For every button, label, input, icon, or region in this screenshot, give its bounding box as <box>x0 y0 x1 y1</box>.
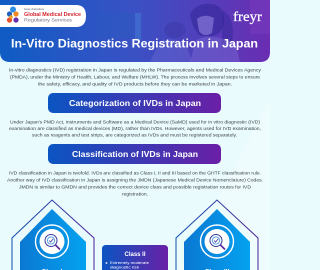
heading: Classification of IVDs in Japan <box>48 144 221 164</box>
logo text: Center of Excellence <box>24 7 44 11</box>
classification paragraph: registration. <box>122 192 148 197</box>
categorization paragraph: examination are classified as medical devices (MD), rather than IVDs. However, agents used for IVD examination, <box>9 126 261 131</box>
classification paragraph: Another way of IVD classification in Japan is assigning the JMDN (Japanese Medical Device Nomenclature) Codes. <box>7 178 263 183</box>
icon: coloured dots cluster <box>7 6 19 23</box>
freyr logo: freyr <box>233 10 262 25</box>
bullet text: diagnostic risk <box>110 266 139 270</box>
classification paragraph: IVD classification in Japan is twofold. IVDs are classified as Class I, II and III based on the GHTF classification rule. <box>9 171 261 176</box>
header banner <box>0 0 270 62</box>
panel: Class I <box>12 200 94 270</box>
bullet text: Extremely moderate <box>110 261 149 265</box>
panel: Class III <box>176 200 258 270</box>
logo: Global Medical Device Regulatory Services <box>0 5 86 27</box>
logo text <box>24 7 81 24</box>
logo text: Regulatory Services <box>24 18 73 24</box>
classification paragraph: JMDN is similar to GMDN and provides the correct device class and possible registration routes for IVD <box>19 185 251 190</box>
classification paragraph <box>7 171 263 197</box>
categorization paragraph: such as reagents and test strips, are categorized as IVDs and must be registered separately. <box>32 133 237 138</box>
categorization paragraph <box>9 120 261 138</box>
title: In-Vitro Diagnostics Registration in Japan <box>11 38 258 51</box>
intro paragraph <box>9 68 262 87</box>
label: Class II: Class II <box>124 252 146 258</box>
categorization paragraph: Under Japan's PMD Act, instruments and Software as a Medical Device (SaMD) used for in vitro diagnostic (IVD) <box>10 120 261 125</box>
icon: magnifier check <box>200 225 234 258</box>
heading: Categorization of IVDs in Japan: Categorization of IVDs in Japan <box>69 98 201 108</box>
panel: Class II <box>102 245 168 270</box>
heading: Categorization of IVDs in Japan <box>48 93 221 113</box>
intro paragraph: In-vitro diagnostics (IVD) registration in Japan is regulated by the Pharmaceuticals and Medical Devices Agency <box>9 68 262 73</box>
intro paragraph: (PMDA), under the Ministry of Health, Labour, and Welfare (MHLW). The process involves several steps to ensure <box>10 75 261 80</box>
bullet text <box>106 261 149 270</box>
icon: magnifier check <box>36 225 68 258</box>
logo text: Global Medical Device <box>24 12 81 18</box>
photo: scientists <box>96 0 270 62</box>
intro paragraph: the safety, efficacy, and quality of IVD products before they can be marketed in Japan. <box>38 82 232 87</box>
heading: Classification of IVDs in Japan: Classification of IVDs in Japan <box>72 149 198 159</box>
